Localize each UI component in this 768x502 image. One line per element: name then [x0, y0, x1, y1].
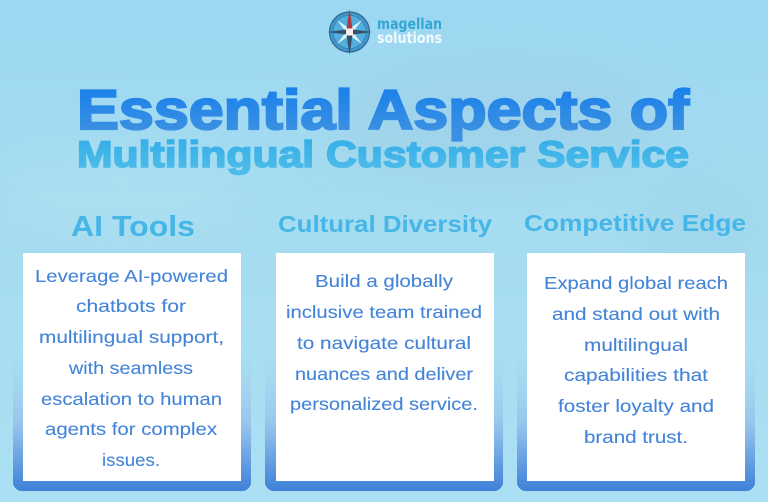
card backing — [517, 300, 755, 491]
card text: escalation to human — [41, 389, 222, 409]
title line 2: Multilingual Customer Service — [77, 134, 689, 175]
card text: Build a globally — [315, 271, 453, 291]
card text: to navigate cultural — [297, 333, 471, 353]
card text: agents for complex — [45, 419, 217, 439]
card text: nuances and deliver — [295, 364, 473, 384]
card text: with seamless — [68, 358, 193, 378]
card text: chatbots for — [76, 296, 186, 316]
logo wordmark — [377, 15, 442, 47]
card text: and stand out with — [552, 304, 720, 324]
card — [527, 253, 745, 481]
panel: Competitive Edge — [517, 210, 755, 491]
card text: multilingual — [584, 335, 688, 355]
title — [77, 78, 689, 175]
card text: Expand global reach — [544, 273, 728, 293]
card text — [544, 273, 728, 447]
card text: brand trust. — [584, 427, 688, 447]
card backing — [13, 300, 251, 491]
icon: compass — [327, 9, 372, 55]
panel: AI Tools — [13, 211, 251, 491]
card text — [286, 271, 482, 414]
card backing — [265, 300, 503, 491]
title line 1: Essential Aspects of — [77, 78, 689, 141]
heading: Competitive Edge: Competitive Edge — [524, 210, 746, 236]
heading: Cultural Diversity: Cultural Diversity — [278, 211, 492, 237]
card — [23, 253, 241, 481]
card text: multilingual support, — [39, 327, 224, 347]
logo wordmark: magellan — [377, 15, 442, 33]
logo — [327, 9, 442, 55]
card text: capabilities that — [564, 365, 708, 385]
panel: Cultural Diversity — [265, 211, 503, 491]
card text: Leverage AI-powered — [35, 266, 228, 286]
card text: issues. — [102, 450, 160, 470]
heading: AI Tools: AI Tools — [71, 211, 195, 243]
card text: inclusive team trained — [286, 302, 482, 322]
card text: personalized service. — [290, 394, 478, 414]
logo wordmark: solutions — [377, 29, 442, 47]
card text: foster loyalty and — [558, 396, 714, 416]
card — [276, 253, 494, 481]
card text — [35, 266, 228, 470]
